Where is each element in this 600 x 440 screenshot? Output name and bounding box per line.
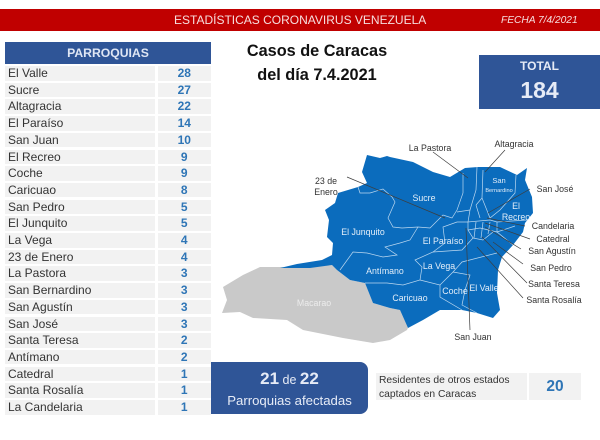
title: del día 7.4.2021	[257, 66, 377, 84]
header banner: ESTADÍSTICAS CORONAVIRUS VENEZUELA	[174, 13, 426, 27]
header banner: FECHA 7/4/2021	[501, 15, 578, 26]
table: parroquias: 2	[181, 333, 188, 347]
table: parroquias: 22	[178, 99, 191, 113]
table: parroquias: San José	[8, 316, 58, 330]
callout labels: Enero	[314, 187, 338, 197]
parish boundaries	[340, 167, 527, 313]
callout labels	[314, 139, 582, 342]
table: parroquias: 3	[181, 283, 188, 297]
table: parroquias: 1	[181, 367, 188, 381]
parish labels: El Junquito	[341, 227, 385, 237]
parish labels: El Valle	[469, 283, 499, 293]
parish labels: Bernardino	[485, 188, 513, 194]
table: parroquias: Coche	[8, 166, 43, 180]
table: parroquias: Antímano	[8, 350, 59, 364]
table: parroquias: 2	[181, 350, 188, 364]
table: parroquias: San Agustín	[8, 300, 73, 314]
parish labels: Sucre	[413, 193, 436, 203]
callout labels: Santa Rosalía	[526, 295, 582, 305]
parish labels: Recreo	[502, 212, 530, 222]
parish labels: San	[492, 176, 506, 185]
table: parroquias: 8	[181, 183, 188, 197]
table: parroquias: El Junquito	[8, 216, 67, 230]
callout: parroquias afectadas: Parroquias afectadas	[227, 392, 352, 408]
callout labels: San Agustín	[528, 246, 576, 256]
table: parroquias: El Paraíso	[8, 116, 63, 130]
table: parroquias: 5	[181, 200, 188, 214]
table: parroquias: 1	[181, 400, 188, 414]
region: Macarao	[222, 265, 408, 343]
callout labels: Candelaria	[532, 221, 574, 231]
table: parroquias: Altagracia	[8, 99, 61, 113]
table: parroquias: 3	[181, 266, 188, 280]
parish labels: La Vega	[423, 261, 455, 271]
parish labels: El	[512, 201, 520, 211]
table: parroquias: Catedral	[8, 367, 53, 381]
callout: parroquias afectadas	[211, 362, 368, 414]
callout labels: Santa Teresa	[528, 279, 580, 289]
table: parroquias: 5	[181, 216, 188, 230]
table: parroquias: 10	[178, 133, 191, 147]
callout labels: Catedral	[536, 234, 570, 244]
parish labels: Caricuao	[392, 293, 428, 303]
table: parroquias: Santa Rosalía	[8, 383, 83, 397]
total box: 184	[520, 77, 559, 103]
total box: TOTAL	[520, 59, 559, 73]
title: Casos de Caracas	[247, 42, 387, 60]
table: parroquias: Santa Teresa	[8, 333, 78, 347]
parish labels: El Paraíso	[423, 236, 463, 246]
table: parroquias: 28	[178, 66, 191, 80]
residents label: Residentes de otros estados	[379, 374, 510, 386]
table: parroquias: San Juan	[8, 133, 59, 147]
table: parroquias: 14	[178, 116, 191, 130]
parish labels: Antímano	[366, 266, 404, 276]
table: parroquias: San Pedro	[8, 200, 65, 214]
callout labels: 23 de	[315, 176, 337, 186]
table: parroquias: El Valle	[8, 66, 48, 80]
table: parroquias: PARROQUIAS	[67, 46, 149, 60]
parish labels	[297, 176, 530, 308]
table: parroquias: Sucre	[8, 83, 39, 97]
table: parroquias: 1	[181, 383, 188, 397]
table: parroquias: Caricuao	[8, 183, 56, 197]
table: parroquias	[5, 42, 211, 415]
header banner	[0, 9, 600, 31]
table: parroquias: La Vega	[8, 233, 52, 247]
table: parroquias: 3	[181, 316, 188, 330]
callout: parroquias afectadas: 21 de 22	[260, 369, 319, 388]
table: parroquias: La Pastora	[8, 266, 66, 280]
leader lines	[347, 150, 530, 330]
residents label	[376, 373, 527, 400]
callout labels: San José	[537, 184, 573, 194]
table: parroquias: 3	[181, 300, 188, 314]
table: parroquias: 4	[181, 250, 188, 264]
callout labels: Altagracia	[494, 139, 534, 149]
table: parroquias: El Recreo	[8, 150, 61, 164]
table: parroquias: San Bernardino	[8, 283, 91, 297]
callout labels: San Pedro	[530, 263, 572, 273]
table: parroquias: La Candelaria	[8, 400, 83, 414]
table: parroquias: 4	[181, 233, 188, 247]
total box	[479, 55, 600, 108]
table: parroquias: 23 de Enero	[8, 250, 73, 264]
table: parroquias: 9	[181, 166, 188, 180]
region: Caracas parishes	[280, 155, 533, 328]
parish labels: Coche	[442, 286, 468, 296]
title	[247, 42, 387, 84]
residents value	[529, 373, 581, 400]
callout labels: La Pastora	[409, 143, 451, 153]
parish labels: Macarao	[297, 298, 331, 308]
residents value: 20	[546, 378, 564, 395]
table: parroquias: 27	[178, 83, 191, 97]
callout labels: San Juan	[454, 332, 492, 342]
table: parroquias: 9	[181, 150, 188, 164]
residents label: captados en Caracas	[379, 389, 476, 400]
